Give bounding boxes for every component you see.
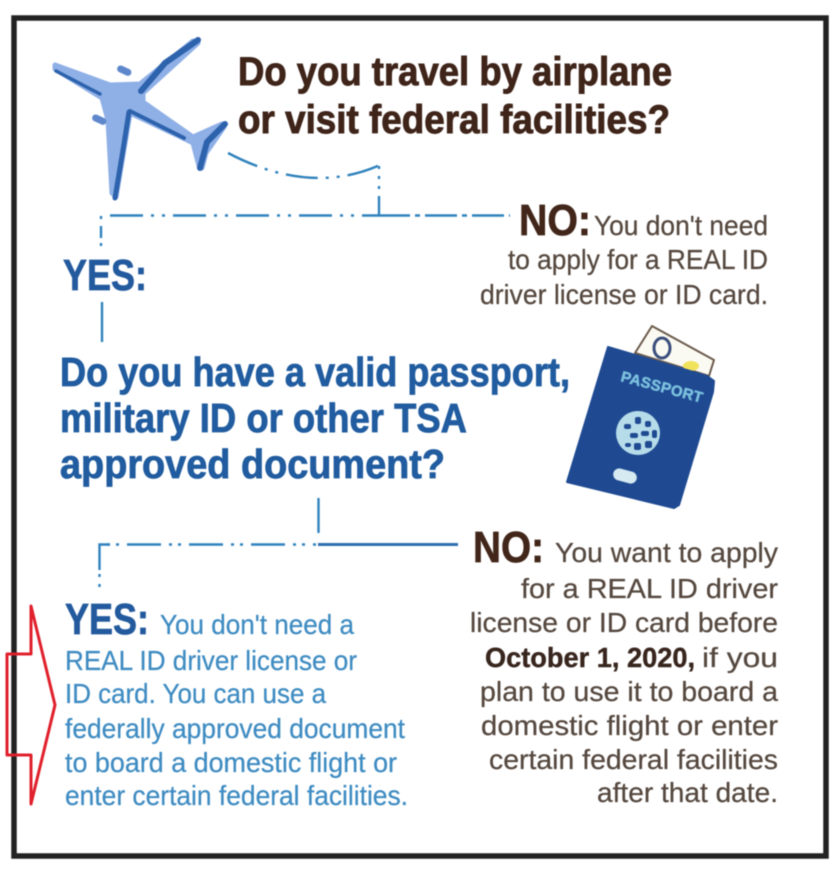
text: first NO answer <box>480 196 768 310</box>
heading: second question: approved document? <box>60 441 445 487</box>
text: second NO answer: NO: <box>473 523 544 572</box>
connector: second question branches <box>100 498 458 590</box>
text: second NO answer: if you <box>702 642 778 673</box>
heading: first question: Do you travel by airplane <box>238 50 672 94</box>
text: first NO answer: NO: <box>519 196 591 245</box>
label: first YES: YES: <box>63 251 147 300</box>
text: first NO answer: to apply for a REAL ID <box>508 244 768 275</box>
text: first NO answer: You don't need <box>594 210 768 241</box>
text: second NO answer: for a REAL ID driver <box>521 573 778 604</box>
connector: first question branches <box>101 153 510 342</box>
heading: second question: military ID or other TSA <box>60 395 467 441</box>
text: second NO answer: October 1, 2020, <box>485 642 695 673</box>
text: first NO answer: driver license or ID card. <box>480 279 768 310</box>
icon: passport: PASSPORT <box>619 368 705 407</box>
text: second YES answer: REAL ID driver license or <box>65 645 357 676</box>
text: second YES answer: enter certain federal facilities. <box>65 780 408 811</box>
text: second YES answer: to board a domestic flight or <box>65 747 397 778</box>
text: second NO answer: certain federal facilities <box>489 744 778 775</box>
text: second YES answer: You don't need a <box>160 609 355 640</box>
arrow: red callout pointing right <box>7 606 55 804</box>
text: second NO answer: domestic flight or enter <box>481 710 778 741</box>
text: second YES answer: ID card. You can use a <box>65 678 327 709</box>
heading: first question <box>238 50 672 142</box>
icon: passport <box>567 326 714 508</box>
text: second NO answer <box>470 523 779 808</box>
text: second NO answer: You want to apply <box>555 537 778 568</box>
text: second YES answer: federally approved document <box>65 713 405 744</box>
heading: first question: or visit federal facilities? <box>238 98 670 142</box>
heading: second question <box>60 349 570 487</box>
text: second NO answer: license or ID card before <box>470 607 778 638</box>
text: second YES answer: YES: <box>65 595 149 644</box>
text: second NO answer: plan to use it to board a <box>480 676 779 707</box>
icon: airplane <box>55 40 225 198</box>
text: second YES answer <box>65 595 408 811</box>
text: second NO answer: after that date. <box>597 777 778 808</box>
heading: second question: Do you have a valid passport, <box>60 349 570 395</box>
